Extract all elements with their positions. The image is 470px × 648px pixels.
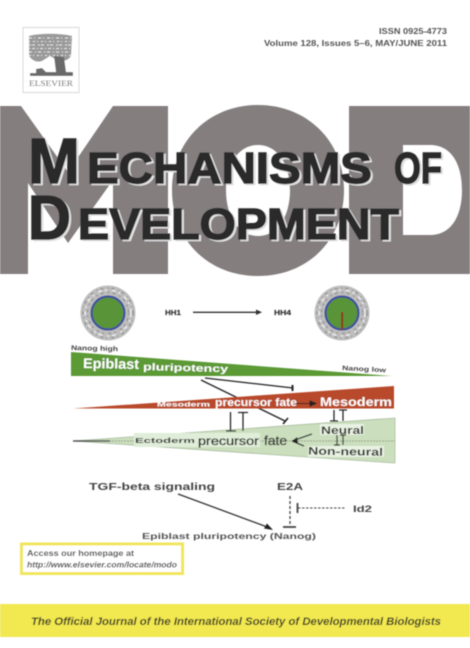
- HH4 label: HH4: [274, 308, 292, 317]
- E2A inhibition: [283, 496, 296, 527]
- title line 2: D: [28, 184, 71, 253]
- inhibition lines from epiblast: [201, 378, 293, 424]
- branching arrows: [292, 434, 312, 446]
- Neural label: [320, 424, 364, 435]
- TGF-beta signaling label: TGF-beta signaling: [89, 482, 215, 493]
- title shadow: OF: [396, 146, 444, 194]
- ISSN: ISSN 0925-4773: [379, 27, 447, 36]
- precursor fate label: precursor fate: [215, 397, 297, 409]
- stage arrow: [165, 308, 292, 317]
- letter D: [349, 106, 470, 274]
- banner text: The Official Journal of the International Society of Developmental Biologists: [31, 616, 441, 628]
- Epiblast pluripotency label: Epiblast pluripotency (Nanog): [142, 531, 316, 541]
- germ layer inhibition pairs: [226, 410, 347, 431]
- society banner: [0, 604, 470, 637]
- embryo left: [80, 286, 136, 340]
- tree canopy: [29, 34, 72, 62]
- title shadow: [30, 126, 444, 254]
- title shadow: ECHANISMS: [89, 146, 374, 194]
- primitive streak: [341, 312, 343, 330]
- issue information: [264, 27, 448, 48]
- neural inhibition pair: [334, 435, 346, 445]
- Non-neural label: [308, 446, 384, 457]
- mesoderm wedge: [73, 386, 394, 409]
- letter M: [0, 106, 168, 274]
- Nanog high label: Nanog high: [71, 345, 118, 353]
- volume and date: Volume 128, Issues 5–6, MAY/JUNE 2011: [264, 39, 448, 48]
- HH1 label: HH1: [165, 308, 181, 317]
- title line 1: ECHANISMS: [87, 144, 372, 193]
- tree trunk and ground: [30, 56, 73, 76]
- ectoderm wedge: fate: [264, 434, 287, 448]
- epiblast wedge: [71, 345, 392, 376]
- publisher name: ELSEVIER: [29, 79, 74, 88]
- arrow to mesoderm: [295, 401, 316, 406]
- title line 1: [28, 125, 442, 197]
- Elsevier logo: [23, 28, 79, 92]
- title shadow: D: [30, 186, 73, 254]
- embryo right: [314, 286, 370, 340]
- Id2 label: Id2: [353, 504, 372, 515]
- homepage box: [22, 544, 182, 574]
- letter O: [172, 105, 344, 276]
- title line 1: M: [28, 125, 80, 197]
- pluripotency label: pluripotency: [143, 362, 229, 375]
- homepage text: Access our homepage at: [27, 548, 134, 558]
- Nanog low label: Nanog low: [342, 365, 387, 374]
- ectoderm wedge: [73, 418, 395, 463]
- signaling arrow: [178, 494, 273, 530]
- title shadow: M: [30, 126, 82, 198]
- ectoderm wedge: Ectoderm: [135, 438, 195, 445]
- title shadow: EVELOPMENT: [80, 202, 401, 250]
- ectoderm wedge: Non-neural: [308, 446, 383, 459]
- title line 1: OF: [394, 144, 442, 193]
- journal title: [28, 125, 444, 254]
- Mesoderm label: Mesoderm: [320, 397, 392, 409]
- ectoderm wedge: Neural: [321, 425, 364, 437]
- arrow: [193, 310, 262, 315]
- mesoderm precursor fate label: Mesoderm: [157, 402, 210, 408]
- title line 2: EVELOPMENT: [78, 200, 399, 249]
- ectoderm precursor fate label: [134, 433, 260, 447]
- background letters MOD: [0, 105, 470, 276]
- Id2 inhibition: [298, 503, 346, 513]
- precursor fate label: precursor: [198, 436, 259, 448]
- Epiblast label: Epiblast: [83, 355, 140, 372]
- title line 2: [28, 184, 399, 253]
- E2A label: E2A: [277, 482, 303, 493]
- homepage URL: http://www.elsevier.com/locate/modo: [27, 560, 177, 570]
